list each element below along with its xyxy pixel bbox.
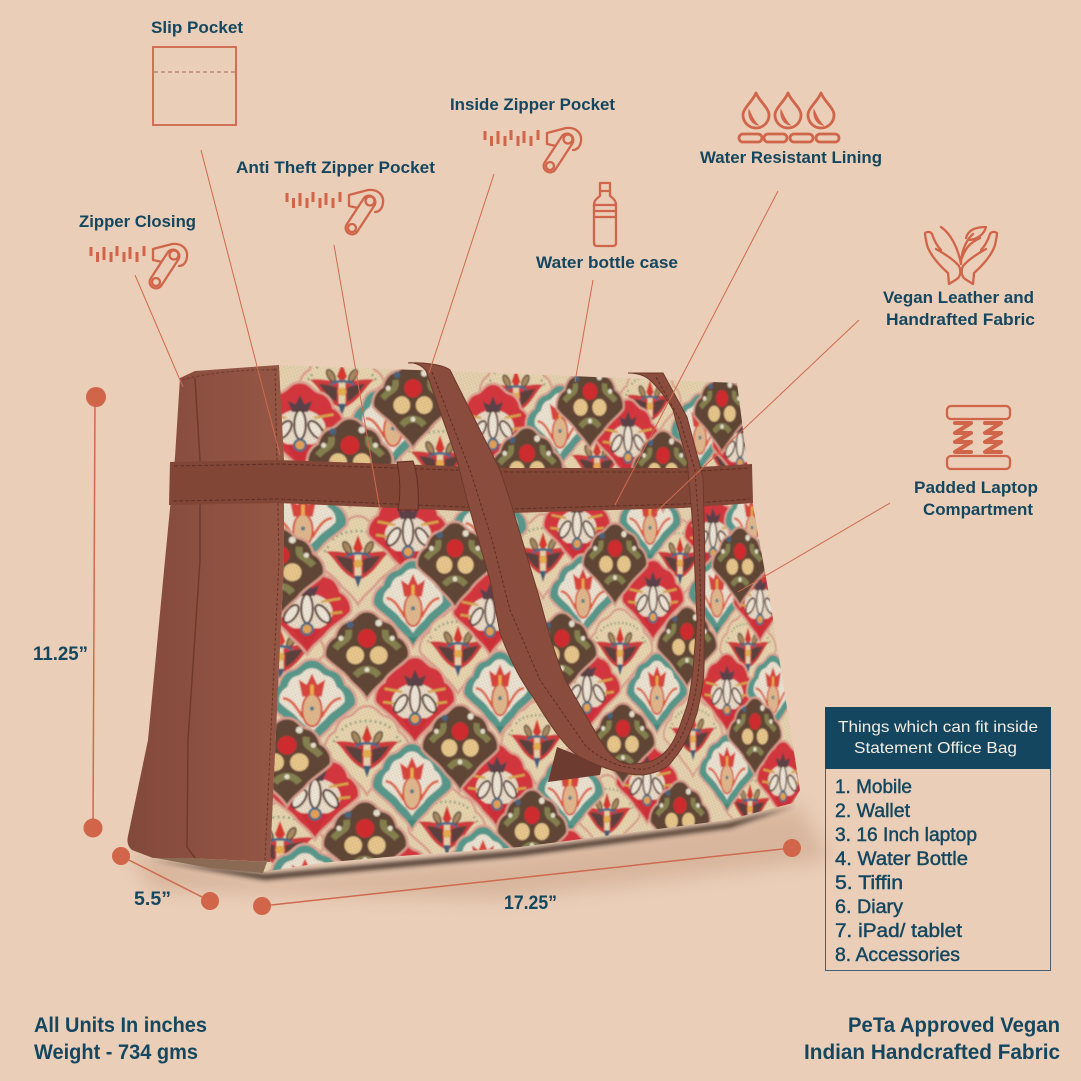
label: vegan leather: Handrafted Fabric (886, 310, 1035, 329)
dimension: width: 17.25” (504, 893, 557, 914)
panel: things which can fit inside: 1. Mobile (835, 777, 912, 798)
panel: things which can fit inside: 8. Accessories (835, 945, 960, 966)
label: vegan leather: Vegan Leather and (883, 288, 1034, 307)
label: vegan leather (883, 227, 1035, 329)
panel: things which can fit inside: 6. Diary (835, 897, 904, 918)
panel: things which can fit inside (825, 707, 1051, 970)
dimension: height: 11.25” (33, 644, 88, 665)
leather belt (169, 460, 753, 513)
label: water resistant lining: Water Resistant Lining (700, 148, 882, 167)
panel: things which can fit inside: 4. Water Bottle (835, 849, 968, 870)
footer right: certification (804, 1014, 1060, 1064)
label: padded laptop compartment (914, 406, 1038, 519)
panel: things which can fit inside: 3. 16 Inch laptop (835, 825, 977, 846)
label: inside zipper pocket (450, 95, 615, 170)
panel: things which can fit inside: 7. iPad/ tablet (835, 921, 963, 942)
panel: things which can fit inside: Things which can fit inside (838, 719, 1038, 736)
leader lines (135, 150, 890, 592)
label: padded laptop compartment: Compartment (923, 500, 1033, 519)
patterned fabric panel (264, 365, 800, 872)
dimension: depth (112, 847, 219, 910)
footer left: units and weight: All Units In inches (34, 1014, 207, 1037)
leather side panel (127, 365, 284, 862)
tag (548, 747, 602, 782)
leather strap handle (408, 363, 705, 775)
label: water bottle case (536, 183, 678, 272)
label: anti theft zipper pocket: Anti Theft Zipper Pocket (236, 158, 435, 177)
label: slip pocket (151, 18, 243, 125)
label: zipper closing (79, 212, 196, 286)
bag illustration (128, 362, 800, 873)
label: slip pocket: Slip Pocket (151, 18, 243, 37)
dimension: height (33, 387, 106, 838)
label: inside zipper pocket: Inside Zipper Pocket (450, 95, 615, 114)
bag bottom fabric strip (150, 857, 267, 873)
dimension: width (253, 839, 801, 915)
label: anti theft zipper pocket (236, 158, 435, 232)
label: water bottle case: Water bottle case (536, 253, 678, 272)
footer left: units and weight (34, 1014, 207, 1064)
label: padded laptop compartment: Padded Laptop (914, 478, 1038, 497)
panel: things which can fit inside: 5. Tiffin (835, 873, 903, 894)
footer left: units and weight: Weight - 734 gms (34, 1041, 198, 1064)
dimension: depth: 5.5” (134, 889, 171, 910)
footer right: certification: Indian Handcrafted Fabric (804, 1041, 1060, 1064)
footer right: certification: PeTa Approved Vegan (848, 1014, 1060, 1037)
bag shadow (130, 805, 830, 900)
label: zipper closing: Zipper Closing (79, 212, 196, 231)
label: water resistant lining (700, 93, 882, 167)
panel: things which can fit inside: Statement Office Bag (854, 740, 1017, 757)
panel: things which can fit inside: 2. Wallet (835, 801, 911, 822)
